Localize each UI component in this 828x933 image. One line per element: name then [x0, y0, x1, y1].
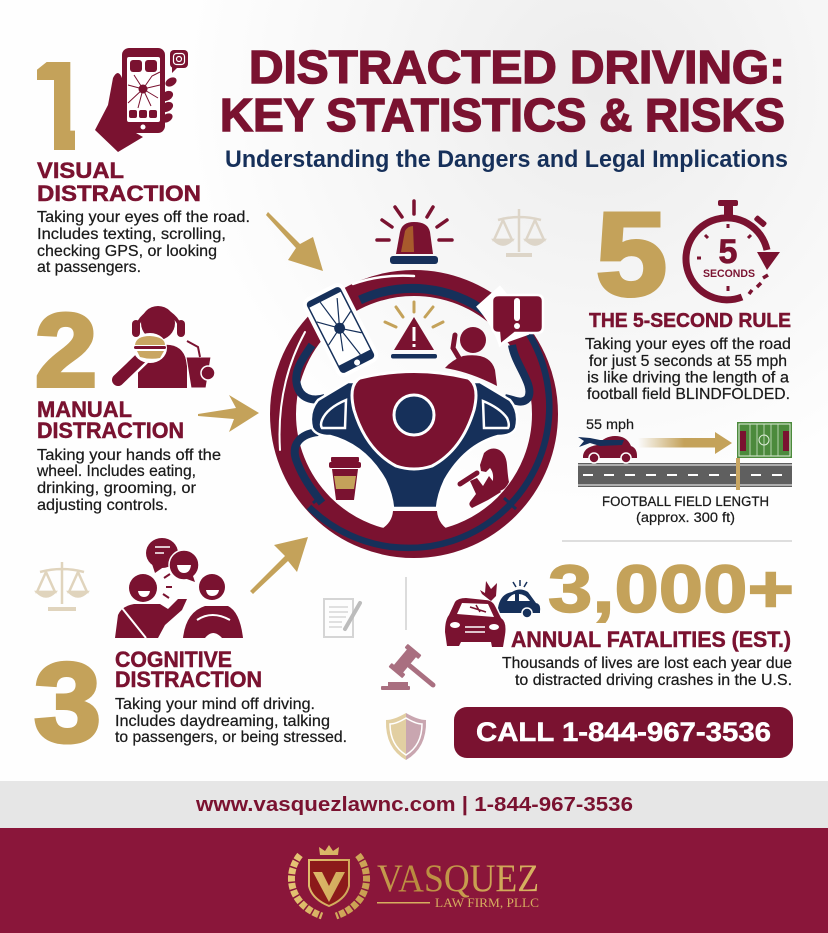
icon: coffee cup: [329, 457, 361, 500]
wheel hub: [352, 372, 476, 469]
arrow: manual to wheel: [198, 395, 259, 432]
number 3: 3: [34, 640, 101, 765]
heading: manual distraction: DISTRACTION: [37, 418, 184, 443]
number 1: 1: [28, 40, 83, 176]
wheel spokes: [311, 382, 517, 508]
icon: stopwatch: [686, 200, 780, 300]
contact band: www.vasquezlawnc.com | 1-844-967-3536: [195, 794, 633, 816]
text: manual description: Taking your hands off the: [37, 447, 221, 464]
heading: visual distraction: VISUAL: [37, 158, 124, 183]
icon: alert bubble: [492, 295, 543, 345]
panel: cognitive distraction: [34, 538, 347, 765]
text: cognitive description: to passengers, or being stressed.: [115, 729, 347, 746]
arrow: cognitive to wheel: [250, 537, 308, 594]
stat: 3,000+: 3,000+: [548, 552, 794, 627]
icon: stopwatch: 5: [719, 233, 737, 271]
icon: woman with microphone: [460, 448, 509, 508]
text: visual description: at passengers.: [37, 259, 141, 276]
text: cognitive description: Taking your mind off driving.: [115, 696, 315, 713]
caption: football field length: (approx. 300 ft): [636, 510, 735, 525]
text: rule description: is like driving the length of a: [587, 370, 789, 386]
text: cognitive description: [115, 696, 347, 746]
logo: wreath and crest: [291, 845, 367, 916]
icon: driver talking with passenger: [115, 538, 243, 638]
heading: visual distraction: [37, 158, 201, 206]
text: manual description: adjusting controls.: [37, 497, 168, 514]
heading: visual distraction: DISTRACTION: [37, 181, 201, 206]
icon: faded document and pen: [324, 599, 360, 637]
icon: hand holding cracked phone: [95, 48, 188, 152]
icon: faded shield: [386, 713, 426, 760]
arrow: visual to wheel: [266, 212, 323, 271]
text: visual description: Includes texting, scrolling,: [37, 226, 226, 243]
text: rule description: Taking your eyes off the road: [585, 336, 791, 353]
title: DISTRACTED DRIVING:: [249, 41, 785, 93]
icon: person eating with headphones: [118, 306, 215, 388]
number 2: 2: [35, 293, 97, 409]
logo: firm name: VASQUEZ: [377, 857, 539, 900]
icon: person on phone: [445, 327, 497, 386]
text: manual description: drinking, grooming, or: [37, 480, 196, 497]
text: rule description: football field BLINDFOLDED.: [587, 386, 790, 403]
text: visual description: Taking your eyes off the road.: [37, 209, 250, 226]
heading: the 5-second rule: THE 5-SECOND RULE: [589, 310, 791, 332]
panel: manual distraction: [35, 293, 221, 514]
icon: faded gavel: [381, 644, 433, 690]
wheel rim: [283, 283, 545, 545]
road diagram: [578, 422, 792, 490]
call button: CALL 1-844-967-3536: [476, 717, 771, 747]
speed label: 55 mph: [586, 416, 634, 432]
heading: cognitive distraction: DISTRACTION: [115, 667, 262, 692]
icon: crashed cars: [445, 580, 540, 647]
road: [578, 463, 792, 487]
text: cognitive description: Includes daydreaming, talking: [115, 713, 330, 730]
marker post: [736, 458, 740, 490]
icon: faded scales left: [37, 562, 87, 609]
heading: annual fatalities: ANNUAL FATALITIES (EST.): [511, 627, 791, 652]
text: manual description: wheel. Includes eating,: [36, 463, 196, 480]
icon: faded scales top: [494, 209, 544, 255]
text: manual description: [36, 447, 221, 514]
text: rule description: [585, 336, 791, 403]
text: fatalities description: Thousands of lives are lost each year due: [502, 655, 792, 672]
panel: annual fatalities: [445, 552, 794, 689]
contact band: [0, 781, 828, 828]
heading: cognitive distraction: COGNITIVE: [115, 647, 232, 672]
icon: cracked phone: [303, 283, 378, 377]
title: KEY STATISTICS & RISKS: [220, 89, 785, 141]
text: fatalities description: [502, 655, 792, 689]
panel: five-second rule: [578, 189, 792, 525]
call button: [454, 707, 793, 758]
icon: stopwatch: SECONDS: [703, 268, 755, 280]
icon: alarm beacon: [377, 201, 452, 264]
text: fatalities description: to distracted driving crashes in the U.S.: [515, 672, 792, 689]
icon: warning triangle: [385, 302, 443, 358]
number 5: 5: [596, 189, 667, 321]
steering wheel: [280, 276, 549, 548]
football field: [737, 422, 792, 458]
subtitle: Understanding the Dangers and Legal Implications: [225, 146, 788, 173]
text: visual description: [37, 209, 250, 276]
heading: manual distraction: [37, 397, 184, 443]
caption: football field length: FOOTBALL FIELD LENGTH: [602, 494, 769, 509]
logo: firm descriptor: LAW FIRM, PLLC: [435, 895, 539, 910]
arrow: gradient: [638, 438, 715, 448]
text: visual description: checking GPS, or looking: [37, 243, 217, 260]
caption: football field length: [602, 494, 769, 525]
footer band: [0, 828, 828, 933]
blindfolded car: [578, 436, 637, 463]
panel: visual distraction: [28, 40, 250, 276]
text: rule description: for just 5 seconds at 55 mph: [589, 353, 787, 370]
heading: manual distraction: MANUAL: [37, 397, 132, 422]
heading: cognitive distraction: [115, 647, 262, 692]
title: [220, 41, 785, 141]
